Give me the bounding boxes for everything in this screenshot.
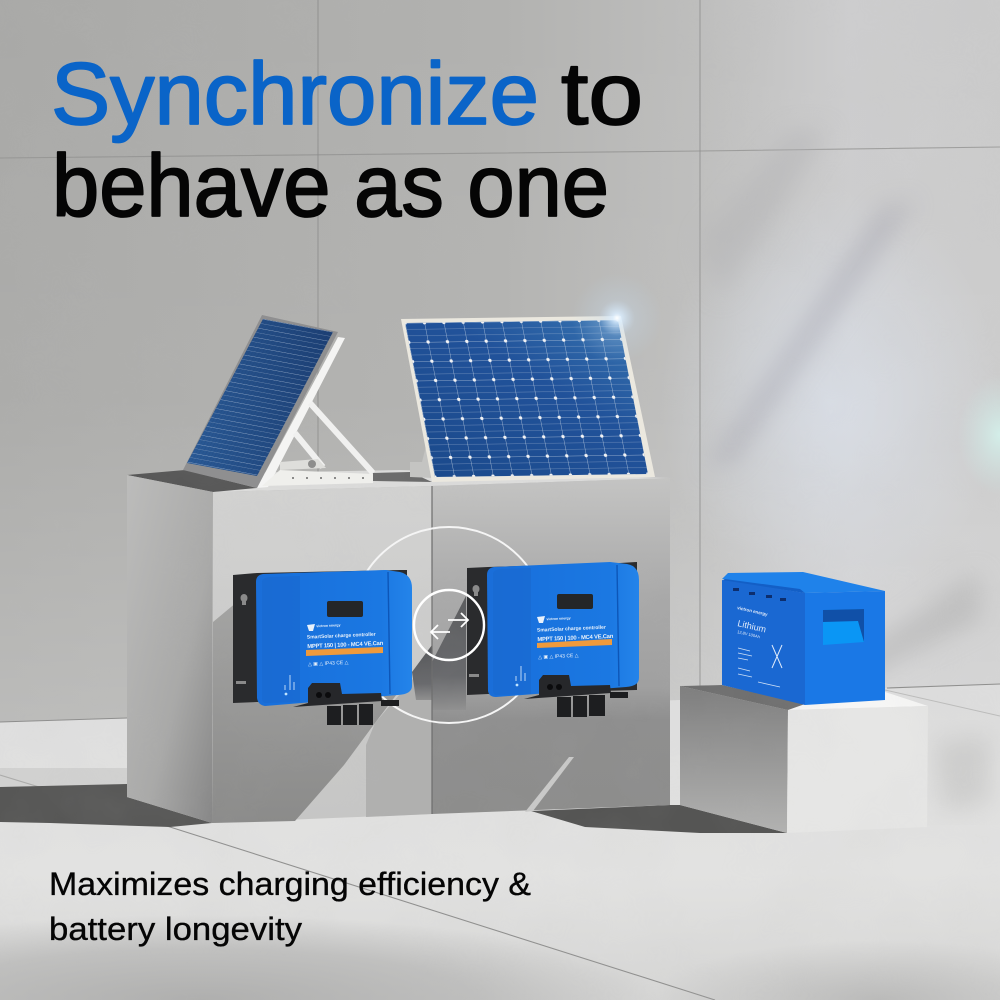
- icon: charge controller left: MPPT 150 | 100 - MC4 VE.Can: [307, 641, 384, 650]
- icon: charge controller left: victron energy: [316, 623, 341, 628]
- title: Synchronize: [51, 44, 539, 143]
- icon: charge controller right: SmartSolar charge controller: [537, 625, 606, 634]
- floor: [0, 684, 1000, 1000]
- icon: charge controller left: △ ▣ △ IP43 CE △: [308, 660, 349, 668]
- title: [51, 44, 643, 235]
- plinth top surface: [127, 470, 670, 492]
- subtitle text: [49, 866, 531, 947]
- plinth front face: [212, 486, 432, 823]
- icon: charge controller right: △ ▣ △ IP43 CE △: [538, 653, 579, 661]
- icon: sync arrows in circle: [414, 590, 484, 660]
- icon: charge controller right: MPPT 150 | 100 - MC4 VE.Can: [537, 634, 614, 643]
- icon: lithium battery: [722, 572, 885, 705]
- panel: main concrete plinth: [127, 470, 670, 823]
- icon: small solar panel on stand: [183, 315, 373, 488]
- icon: lithium battery: victron energy: [737, 605, 769, 617]
- subtitle text: Maximizes charging efficiency &: [49, 866, 531, 902]
- plinth right face: [432, 478, 670, 814]
- cast shadow: left of plinth: [0, 784, 212, 827]
- icon: light flare: [572, 273, 662, 363]
- icon: teal glow at right edge: [958, 375, 1000, 495]
- plinth diagonal shadow: [212, 597, 400, 823]
- icon: charge controller left: [233, 570, 412, 725]
- title: behave as one: [52, 136, 609, 235]
- cast shadow: between plinths: [531, 805, 787, 833]
- icon: lithium battery: Lithium: [737, 618, 767, 634]
- icon: sync ring, large: [351, 527, 547, 723]
- icon: charge controller right: [467, 562, 639, 717]
- icon: charge controller right: victron energy: [546, 616, 571, 621]
- subtitle text: battery longevity: [49, 911, 302, 947]
- title: to: [561, 44, 643, 143]
- icon: charge controller left: SmartSolar charge controller: [307, 632, 376, 641]
- icon: lithium battery: 12,8V 100Ah: [737, 629, 760, 639]
- icon: large solar panel: [401, 316, 655, 482]
- plinth side face: [127, 475, 213, 823]
- panel: battery plinth: [680, 685, 928, 833]
- concrete wall background: [0, 0, 1000, 730]
